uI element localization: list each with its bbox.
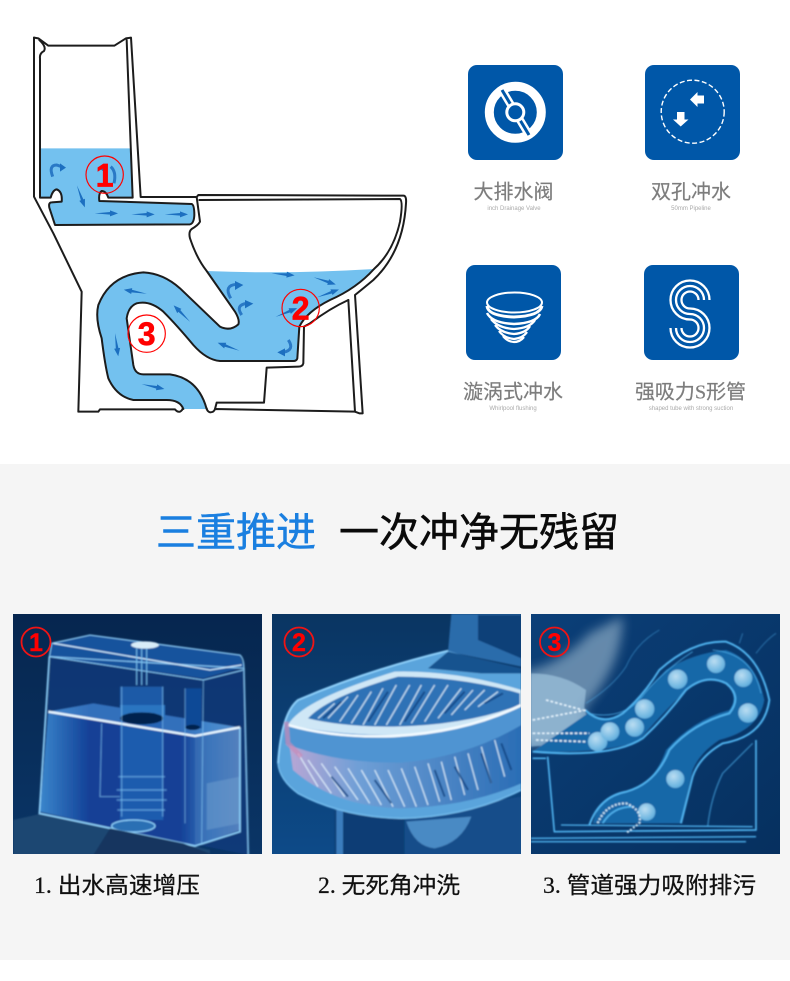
toilet outline — [34, 38, 406, 413]
marker 1: 1 — [29, 629, 43, 657]
callout 2 — [282, 289, 319, 327]
callout 2: 2 — [292, 291, 310, 327]
heading: 三重推进 — [156, 511, 316, 555]
icon: triple S — [644, 265, 739, 360]
feature: dual-hole flush: 50mm Pipeline — [671, 206, 712, 212]
feature: S-shaped trap: shaped tube with strong suction — [649, 406, 733, 412]
caption 1: 1. 出水高速增压 — [34, 873, 200, 898]
photo panel 2: bowl — [272, 614, 521, 855]
feature: large drain valve — [468, 65, 563, 212]
marker 3 — [540, 628, 569, 657]
heading: 一次冲净无残留 — [339, 511, 619, 555]
caption 2: 2. 无死角冲洗 — [318, 873, 460, 898]
feature: dual-hole flush — [645, 65, 740, 212]
callout 1: 1 — [96, 157, 114, 193]
feature: S-shaped trap — [635, 265, 746, 412]
photo panel 1: cistern — [13, 614, 262, 855]
feature: whirlpool flush — [463, 265, 563, 412]
photo panel 3: trapway — [516, 614, 780, 854]
feature: large drain valve: 大排水阀 — [474, 180, 554, 204]
marker 3: 3 — [548, 629, 561, 657]
icon: whirlpool — [466, 265, 561, 360]
feature: whirlpool flush: 漩涡式冲水 — [463, 380, 563, 404]
marker 1 — [22, 628, 50, 657]
tank water — [40, 148, 194, 225]
toilet cross-section diagram — [34, 38, 406, 413]
heading — [156, 511, 619, 555]
pipe body — [533, 650, 764, 823]
balls — [588, 655, 758, 821]
feature: S-shaped trap: 强吸力S形管 — [635, 380, 746, 404]
feature: whirlpool flush: Whirlpool flushing — [489, 406, 537, 412]
icon: dashed circle with arrows — [645, 65, 740, 160]
marker 2 — [284, 628, 314, 657]
marker 2: 2 — [292, 629, 306, 657]
callout 1 — [86, 156, 123, 193]
feature: dual-hole flush: 双孔冲水 — [651, 180, 731, 204]
callout 3: 3 — [138, 316, 156, 352]
section background — [0, 464, 790, 960]
caption 3: 3. 管道强力吸附排污 — [543, 873, 756, 898]
bowl and trapway water — [97, 269, 374, 409]
callout 3 — [128, 315, 165, 352]
swirl water — [516, 617, 623, 747]
flow arrows — [51, 163, 340, 392]
feature: large drain valve: inch Drainage Valve — [487, 206, 541, 212]
icon: valve — [468, 65, 563, 160]
